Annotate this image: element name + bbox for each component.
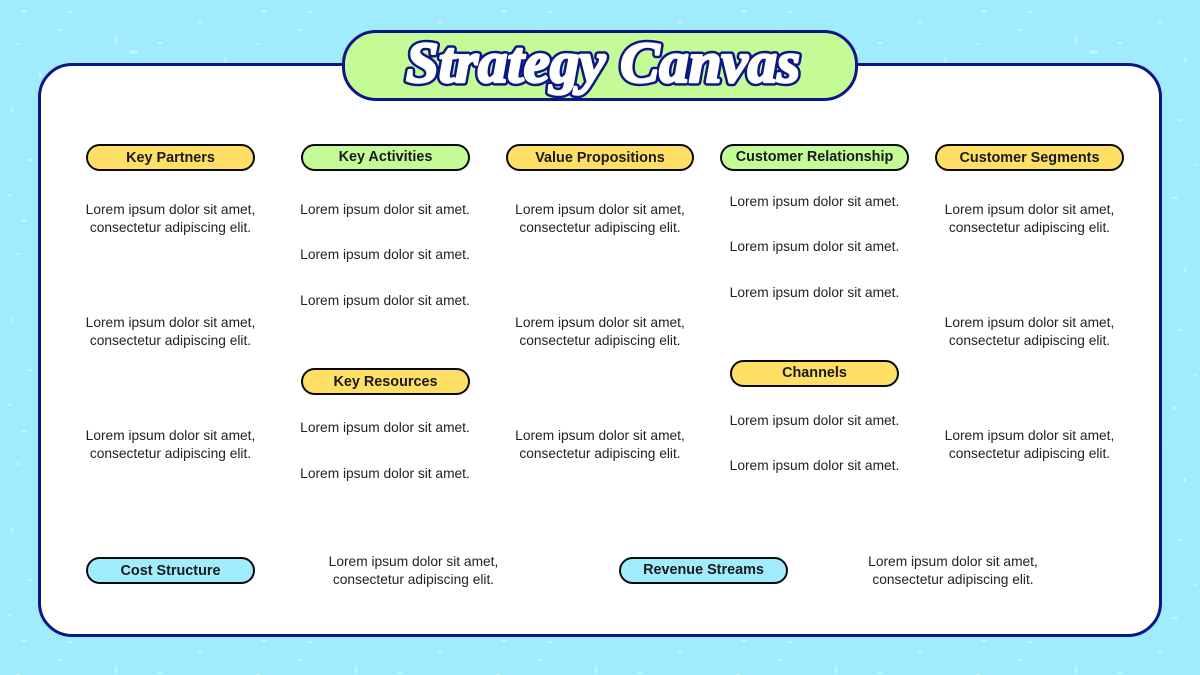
text: Key Partners item 2: [86, 315, 255, 348]
panel: main white canvas: [38, 63, 1162, 637]
heading: Revenue Streams: Revenue Streams: [643, 562, 764, 578]
text: Value Propositions item 2: [515, 315, 685, 348]
text: Value Propositions item 3: [515, 428, 685, 461]
heading: Value Propositions: [506, 144, 694, 171]
text: Key Partners item 1: [86, 202, 255, 235]
text: Key Partners item 3: consectetur adipiscing elit.: [90, 446, 251, 461]
heading: Key Activities: [301, 144, 470, 171]
heading: Customer Relationship: [720, 144, 909, 171]
text: Key Partners item 1: Lorem ipsum dolor sit amet,: [86, 202, 255, 217]
title: Strategy Canvas: [406, 30, 800, 95]
text: Channels item 2: Lorem ipsum dolor sit amet.: [730, 458, 899, 473]
text: Customer Relationship item 2: Lorem ipsum dolor sit amet.: [730, 239, 899, 254]
text: Value Propositions item 2: consectetur adipiscing elit.: [519, 333, 681, 348]
heading: Revenue Streams: [619, 557, 788, 584]
heading: Key Resources: [301, 368, 470, 395]
text: Key Resources item 1: Lorem ipsum dolor sit amet.: [300, 420, 470, 435]
heading: Channels: [730, 360, 899, 387]
text: Key Activities item 1: Lorem ipsum dolor sit amet.: [300, 202, 470, 217]
text: Revenue Streams description: consectetur adipiscing elit.: [872, 572, 1034, 587]
text: Key Activities item 3: Lorem ipsum dolor sit amet.: [300, 293, 470, 308]
text: Revenue Streams description: Lorem ipsum dolor sit amet,: [868, 554, 1038, 569]
heading: Customer Segments: Customer Segments: [960, 150, 1099, 166]
text: Customer Relationship item 1: Lorem ipsum dolor sit amet.: [730, 194, 899, 209]
heading: Customer Segments: [935, 144, 1124, 171]
text: Value Propositions item 1: Lorem ipsum dolor sit amet,: [515, 202, 685, 217]
heading: Key Partners: Key Partners: [126, 150, 215, 166]
heading: Key Partners: [86, 144, 255, 171]
title banner: [342, 30, 858, 101]
heading: Key Resources: Key Resources: [334, 374, 438, 390]
text: Customer Segments item 3: consectetur adipiscing elit.: [949, 446, 1110, 461]
text: Customer Segments item 3: Lorem ipsum dolor sit amet,: [945, 428, 1114, 443]
heading: Cost Structure: Cost Structure: [121, 563, 220, 579]
text: Key Partners item 3: Lorem ipsum dolor sit amet,: [86, 428, 255, 443]
heading: Customer Relationship: Customer Relationship: [736, 149, 893, 165]
text: Key Partners item 2: Lorem ipsum dolor sit amet,: [86, 315, 255, 330]
heading: Cost Structure: [86, 557, 255, 584]
heading: Value Propositions: Value Propositions: [535, 150, 665, 166]
text: Cost Structure description: [329, 554, 498, 587]
text: Customer Segments item 1: consectetur adipiscing elit.: [949, 220, 1110, 235]
heading: Channels: Channels: [782, 365, 847, 381]
text: Key Activities item 2: Lorem ipsum dolor sit amet.: [300, 247, 470, 262]
text: Cost Structure description: consectetur adipiscing elit.: [333, 572, 494, 587]
text: Value Propositions item 3: Lorem ipsum dolor sit amet,: [515, 428, 685, 443]
text: Value Propositions item 3: consectetur adipiscing elit.: [519, 446, 681, 461]
text: Value Propositions item 2: Lorem ipsum dolor sit amet,: [515, 315, 685, 330]
text: Customer Segments item 2: Lorem ipsum dolor sit amet,: [945, 315, 1114, 330]
text: Customer Segments item 1: [945, 202, 1114, 235]
text: Value Propositions item 1: consectetur adipiscing elit.: [519, 220, 681, 235]
text: Revenue Streams description: [868, 554, 1038, 587]
title: Strategy Canvas: [406, 30, 800, 95]
heading: Key Activities: Key Activities: [339, 149, 432, 165]
text: Customer Relationship item 3: Lorem ipsum dolor sit amet.: [730, 285, 899, 300]
text: Key Partners item 3: [86, 428, 255, 461]
text: Customer Segments item 1: Lorem ipsum dolor sit amet,: [945, 202, 1114, 217]
text: Customer Segments item 2: [945, 315, 1114, 348]
text: Key Resources item 2: Lorem ipsum dolor sit amet.: [300, 466, 470, 481]
text: Customer Segments item 3: [945, 428, 1114, 461]
text: Customer Segments item 2: consectetur adipiscing elit.: [949, 333, 1110, 348]
text: Cost Structure description: Lorem ipsum dolor sit amet,: [329, 554, 498, 569]
text: Channels item 1: Lorem ipsum dolor sit amet.: [730, 413, 899, 428]
text: Key Partners item 1: consectetur adipiscing elit.: [90, 220, 251, 235]
text: Key Partners item 2: consectetur adipiscing elit.: [90, 333, 251, 348]
text: Value Propositions item 1: [515, 202, 685, 235]
